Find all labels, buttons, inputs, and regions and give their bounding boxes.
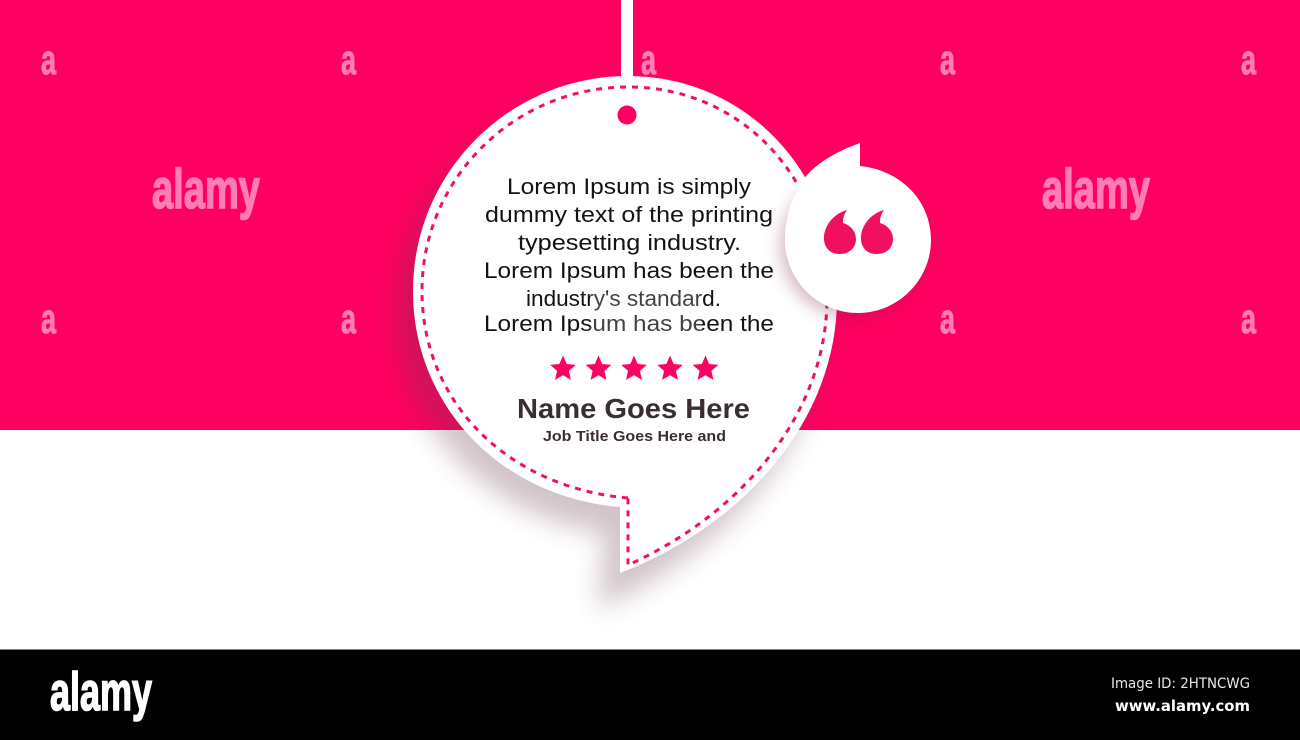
quote text: typesetting industry. (518, 230, 741, 255)
footer logo: alamy (50, 662, 152, 722)
badge shadow (780, 174, 924, 318)
watermark pattern: a (1241, 36, 1256, 83)
bubble body (413, 76, 837, 573)
watermark pattern: a (341, 36, 356, 83)
bubble shadow (396, 105, 822, 608)
quote text: Lorem Ipsum has been the (484, 311, 774, 336)
background: white band (0, 430, 1300, 650)
watermark pattern (41, 36, 1256, 342)
website: www.alamy.com (1115, 697, 1250, 715)
watermark fading the quote text (590, 292, 702, 336)
hole (618, 106, 636, 124)
watermark pattern: alamy (152, 157, 260, 220)
watermark pattern: a (641, 36, 656, 83)
icon: quotation marks (824, 210, 893, 254)
watermark pattern: alamy (1042, 157, 1150, 220)
quote badge (780, 143, 931, 318)
watermark pattern: a (41, 295, 56, 342)
quote text: dummy text of the printing (485, 202, 773, 227)
badge body (785, 143, 931, 313)
quote text: Lorem Ipsum has been the (484, 258, 774, 283)
watermark pattern: a (341, 295, 356, 342)
watermark pattern: a (1241, 295, 1256, 342)
watermark pattern: a (41, 36, 56, 83)
quote text (484, 174, 774, 336)
speech bubble (396, 76, 837, 608)
rating stars (550, 356, 718, 380)
watermark pattern: a (940, 295, 955, 342)
job title: Job Title Goes Here and (543, 429, 726, 445)
dashed stitching (422, 87, 827, 565)
hanging strap (621, 0, 633, 82)
footer bar (0, 650, 1300, 740)
background: pink band (0, 0, 1300, 430)
image id: Image ID: 2HTNCWG (1111, 676, 1250, 692)
name heading: Name Goes Here (517, 393, 750, 424)
watermark pattern: a (940, 36, 955, 83)
quote text: Lorem Ipsum is simply (507, 174, 752, 199)
quote text: industry's standard. (526, 286, 721, 311)
